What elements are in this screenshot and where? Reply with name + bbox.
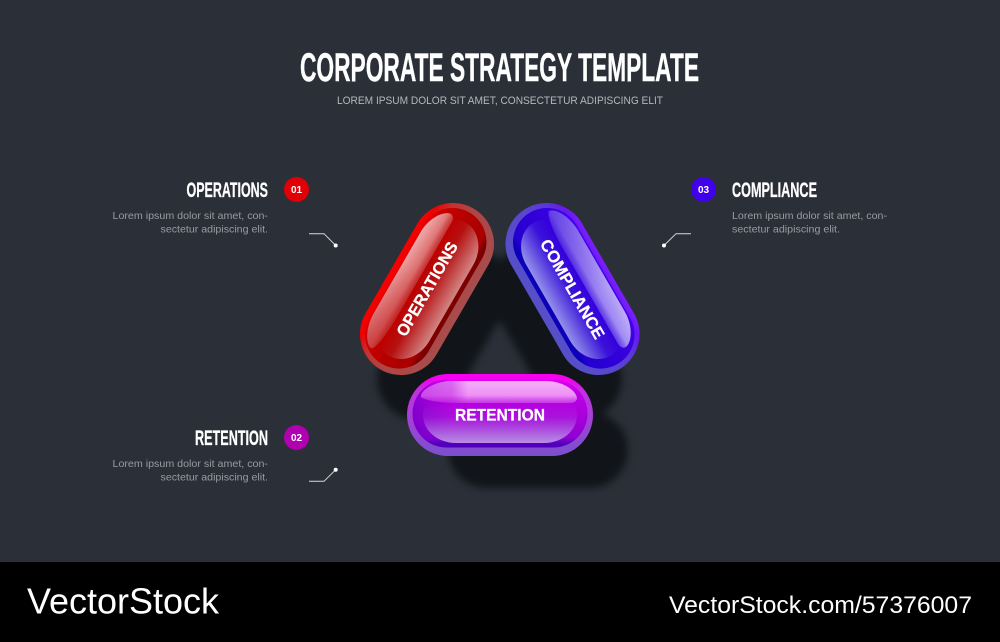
- heading: retention: RETENTION: [195, 426, 268, 450]
- pill: retention: RETENTION: [455, 407, 545, 425]
- heading: operations: OPERATIONS: [186, 178, 268, 202]
- leader line: compliance: [662, 234, 691, 248]
- number badge 01: [284, 177, 309, 202]
- pill: retention: [407, 374, 593, 456]
- pill: operations: [345, 188, 509, 390]
- footer url: VectorStock.com/57376007: [669, 592, 972, 619]
- description: operations: [112, 211, 268, 236]
- number badge 02: [284, 425, 309, 450]
- panel: retention label: [112, 425, 338, 484]
- description: retention: Lorem ipsum dolor sit amet, con-: [112, 459, 268, 470]
- footer logo: VectorStock: [27, 580, 220, 622]
- subtitle: LOREM IPSUM DOLOR SIT AMET, CONSECTETUR ADIPISCING ELIT: [337, 95, 663, 107]
- description: retention: [112, 459, 268, 484]
- leader line: retention: [309, 468, 338, 481]
- pill: compliance: COMPLIANCE: [536, 236, 608, 342]
- description: operations: sectetur adipiscing elit.: [160, 224, 268, 236]
- number badge 01: 01: [291, 185, 302, 196]
- pill: operations: OPERATIONS: [393, 239, 462, 340]
- title: CORPORATE STRATEGY TEMPLATE: [300, 46, 699, 90]
- heading: compliance: COMPLIANCE: [732, 178, 817, 202]
- number badge 02: 02: [291, 433, 302, 444]
- pill shadows: [362, 233, 637, 488]
- description: compliance: sectetur adipiscing elit.: [732, 224, 840, 236]
- number badge 03: 03: [698, 185, 709, 196]
- leader line: operations: [309, 234, 338, 248]
- description: compliance: [732, 211, 887, 236]
- panel: compliance label: [662, 177, 887, 248]
- number badge 03: [691, 177, 716, 202]
- description: retention: sectetur adipiscing elit.: [160, 472, 268, 484]
- description: operations: Lorem ipsum dolor sit amet, con-: [112, 211, 268, 222]
- description: compliance: Lorem ipsum dolor sit amet, con-: [732, 211, 887, 222]
- pill: compliance: [490, 188, 655, 390]
- panel: operations label: [112, 177, 338, 248]
- footer band: [0, 562, 1000, 642]
